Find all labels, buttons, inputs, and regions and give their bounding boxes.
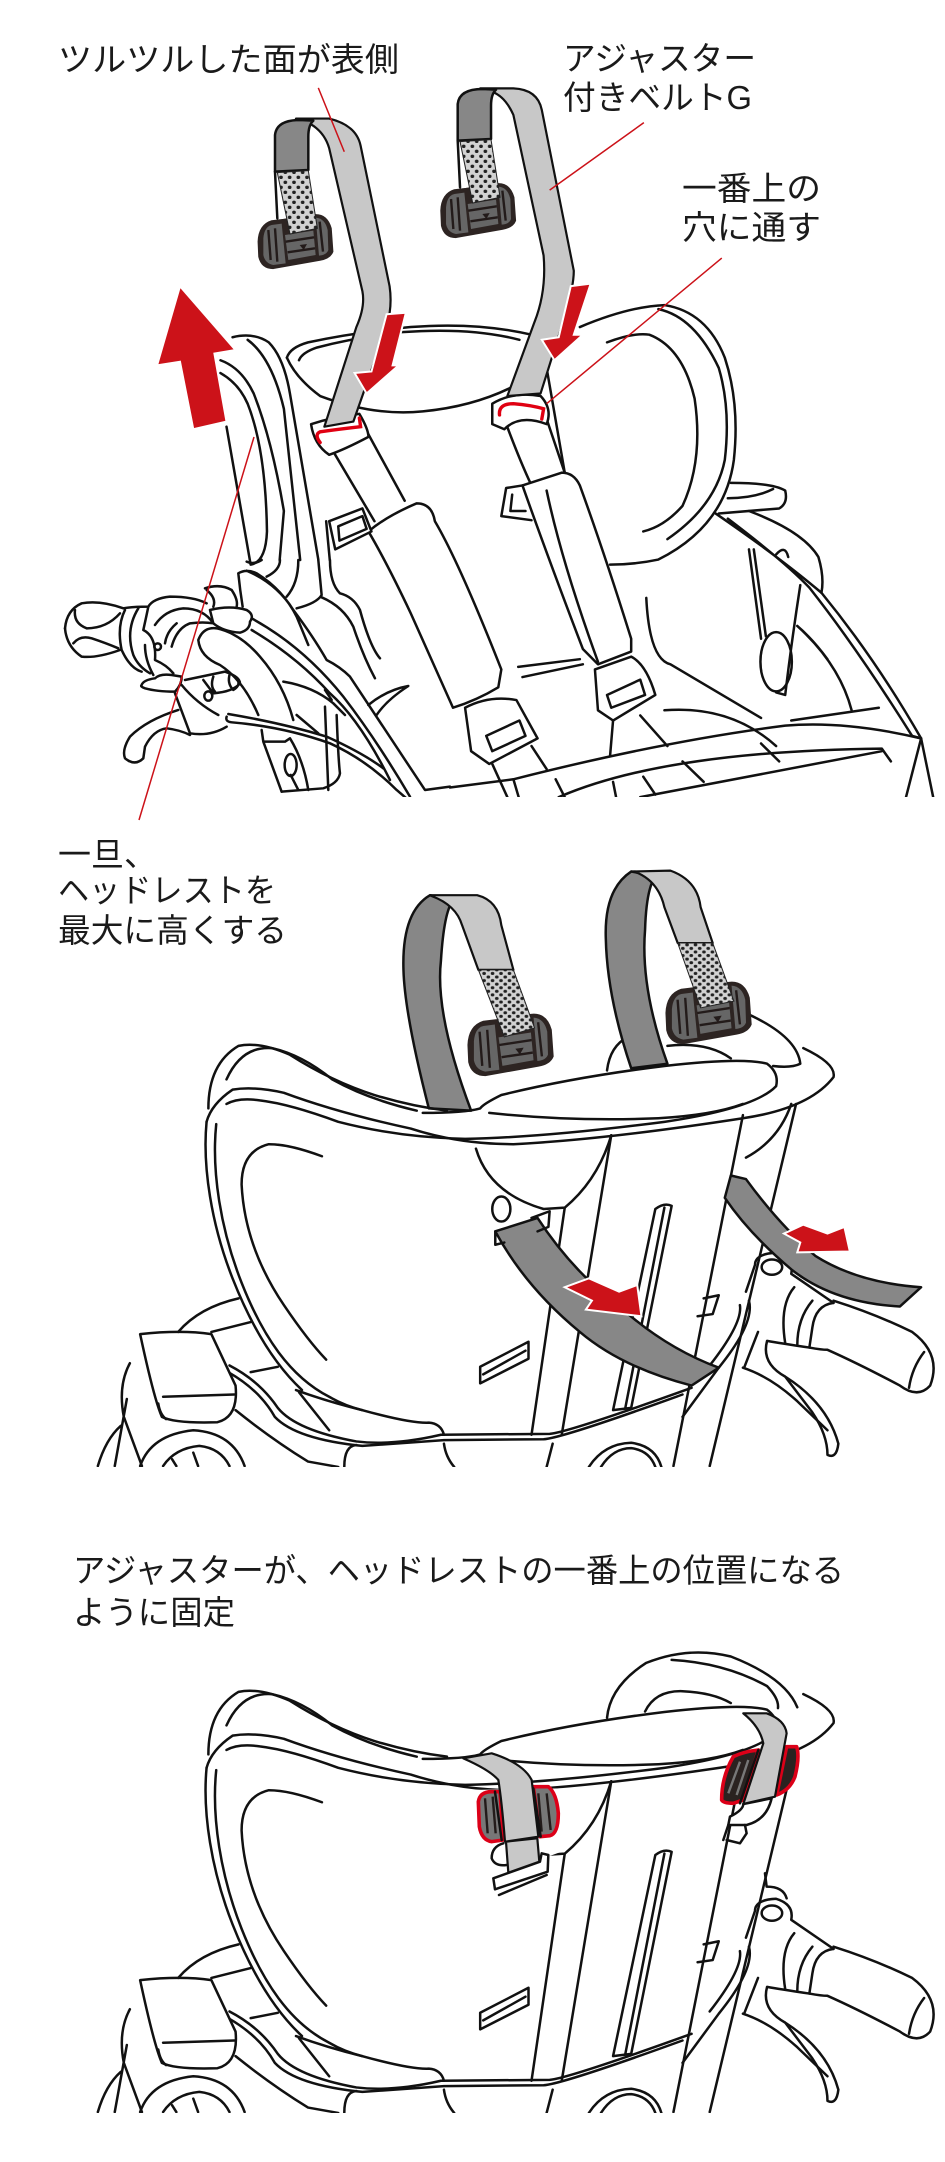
label: raise headrest line 2: ヘッドレストを: [58, 872, 276, 909]
panel: step 3 adjuster fixed: [98, 1652, 934, 2113]
panel: step 2 pull straps through: [98, 871, 934, 1467]
mount post: [765, 1873, 787, 1898]
adjuster left: [468, 970, 553, 1075]
arrow: pull right, left strap: [565, 1278, 641, 1316]
strap end left: [495, 1218, 719, 1386]
adjuster right outlined in red: [722, 1747, 798, 1803]
label: raise headrest line 1: 一旦、: [58, 836, 157, 873]
strap hook detail: [495, 1211, 550, 1245]
rear headrest: [607, 1012, 800, 1070]
label: top hole second line: 穴に通す: [682, 209, 821, 246]
adjuster on right belt: [441, 89, 515, 237]
handlebar grip and brake lever: [65, 560, 450, 800]
label: adjuster belt G: アジャスター: [563, 40, 756, 77]
belt left folded over rim: [463, 1753, 539, 1873]
belt loop right with red highlight: [492, 395, 549, 429]
panel: step 1 raise headrest and thread belt: [65, 88, 933, 800]
heading: smooth side label: ツルツルした面が表側: [58, 41, 399, 78]
arrow: pull right, right strap: [784, 1225, 850, 1252]
label: fix adjuster line 2: ように固定: [73, 1594, 235, 1631]
seat drawing step 3: [98, 1691, 934, 2113]
strap end right: [725, 1175, 921, 1306]
label: adjuster belt G second line: 付きベルトG: [563, 79, 752, 116]
arrow: big red up arrow: [157, 286, 236, 429]
strap loop left: [403, 895, 513, 1111]
arrow: red down arrow right: [542, 284, 591, 360]
label: fix adjuster line 1: アジャスターが、ヘッドレストの一番上の位置になる: [73, 1552, 844, 1589]
arrow: red down arrow left: [355, 313, 406, 393]
strap loop right: [606, 871, 713, 1068]
seat line drawing: [220, 305, 933, 800]
cover over hidden seat lines: [474, 1788, 562, 1869]
belt G left strap: [296, 119, 391, 427]
label: raise headrest line 3: 最大に高くする: [58, 912, 287, 949]
belt loop left with red highlight: [311, 414, 368, 455]
belt G right strap: [480, 88, 574, 396]
red leader lines: [318, 88, 722, 404]
label: top hole: 一番上の: [682, 170, 821, 207]
belt right folded over rim: [723, 1713, 787, 1843]
lower belt slot: [493, 1853, 548, 1889]
rear headrest: [607, 1652, 797, 1718]
seat drawing step 2: [98, 1045, 934, 1467]
adjuster on left belt: [258, 120, 333, 268]
adjuster right: [666, 943, 751, 1043]
adjuster left outlined in red: [478, 1787, 558, 1842]
leader line to headrest note: [139, 437, 254, 820]
